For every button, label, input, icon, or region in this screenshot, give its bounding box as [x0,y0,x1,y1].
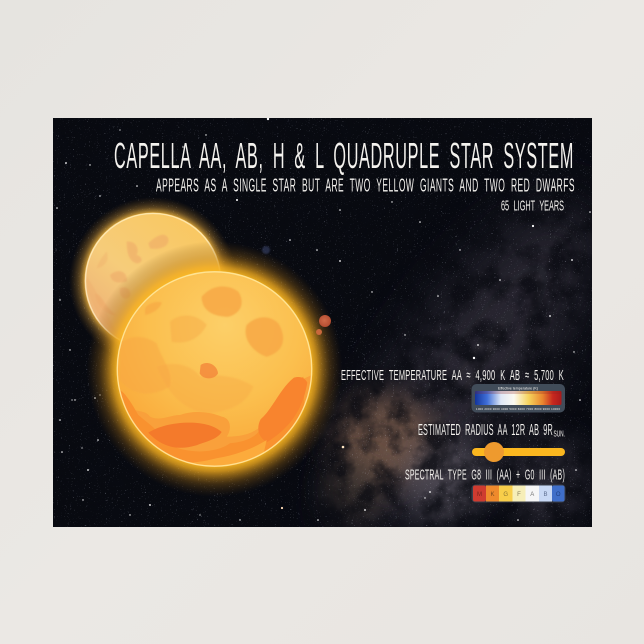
star field [53,118,592,527]
estimated radius label: SUN. [554,430,565,438]
spectral class scale: O [556,492,561,498]
temperature scale chart: Effective temperature (K) [498,386,538,390]
orange lower limb [122,376,311,452]
spectral class scale [472,484,566,502]
temperature scale chart: 1000 2000 3000 4000 5000 6000 7000 8000 9000 10000 [476,407,560,411]
panel: space background [53,118,592,527]
spectral class scale: A [530,492,534,498]
spectral class scale: G [503,492,508,498]
spectral class scale: K [490,492,495,498]
star: Capella L (red dwarf) [316,329,322,335]
star: Capella Aa (front yellow giant) [86,241,342,497]
star: Capella Ab (back yellow giant) [70,198,231,349]
temperature scale chart [472,384,565,412]
distance label: 65 LIGHT YEARS [501,198,564,214]
radius slider [472,442,565,462]
spectral class scale: F [517,492,521,498]
infographic postcard [53,118,592,527]
surface mottling [120,286,283,413]
spectral class scale: B [543,492,548,498]
spectral class scale: M [477,492,482,498]
star: Capella H (red dwarf) [319,315,331,327]
estimated radius label [418,422,565,439]
milky way band [315,198,592,527]
